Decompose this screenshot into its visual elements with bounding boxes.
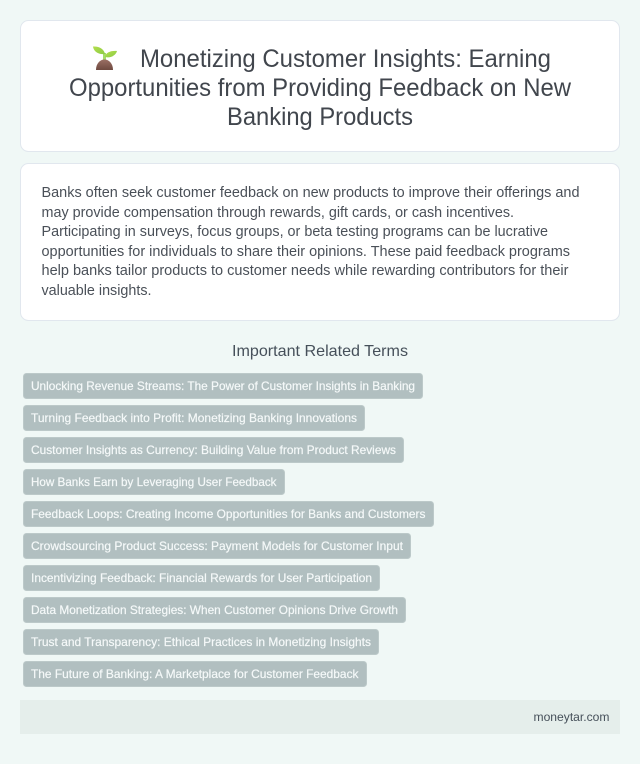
text block: description: Banks often seek customer feedback on new products to improve their offerings and	[42, 185, 580, 201]
heading: important related terms: Important Related Terms	[232, 343, 408, 360]
title: Banking Products	[227, 103, 413, 131]
tag 8: Data Monetization Strategies: When Customer Opinions Drive Growth	[31, 603, 398, 617]
text block: description: opportunities for individuals to share their opinions. These paid feedback programs	[42, 244, 570, 260]
tag 8	[24, 598, 406, 622]
tag 3: Customer Insights as Currency: Building Value from Product Reviews	[31, 443, 396, 457]
text block: description: Participating in surveys, focus groups, or beta testing programs can be lucrative	[42, 224, 548, 240]
text block: description: valuable insights.	[42, 283, 152, 299]
tag 3	[24, 438, 404, 462]
tag 7: Incentivizing Feedback: Financial Rewards for User Participation	[31, 571, 372, 585]
tag 10: The Future of Banking: A Marketplace for Customer Feedback	[31, 667, 359, 681]
panel: description	[20, 164, 620, 320]
tag 5: Feedback Loops: Creating Income Opportunities for Banks and Customers	[31, 507, 426, 521]
text block: description: help banks tailor products to customer needs while rewarding contributors for their	[42, 263, 569, 279]
tag 1: Unlocking Revenue Streams: The Power of Customer Insights in Banking	[31, 379, 415, 393]
title	[69, 45, 572, 131]
tag 9	[24, 630, 378, 654]
list: related term tags	[24, 374, 434, 686]
tag 6	[24, 534, 410, 558]
icon: sprout	[93, 46, 117, 70]
text block: description: may provide compensation through rewards, gift cards, or cash incentives.	[42, 205, 514, 221]
title: Monetizing Customer Insights: Earning	[140, 45, 551, 73]
text block: description	[42, 185, 580, 299]
title: Opportunities from Providing Feedback on New	[69, 74, 572, 102]
tag 5	[24, 502, 434, 526]
footer source text: moneytar.com	[534, 710, 610, 724]
tag 1	[24, 374, 422, 398]
tag 10	[24, 662, 366, 686]
tag 2	[24, 406, 364, 430]
tag 2: Turning Feedback into Profit: Monetizing Banking Innovations	[31, 411, 357, 425]
tag 6: Crowdsourcing Product Success: Payment Models for Customer Input	[31, 539, 404, 553]
tag 7	[24, 566, 380, 590]
tag 4	[24, 470, 284, 494]
footer	[20, 700, 620, 734]
panel: title card	[20, 20, 620, 152]
tag 4: How Banks Earn by Leveraging User Feedback	[31, 475, 277, 489]
tag 9: Trust and Transparency: Ethical Practices in Monetizing Insights	[31, 635, 371, 649]
